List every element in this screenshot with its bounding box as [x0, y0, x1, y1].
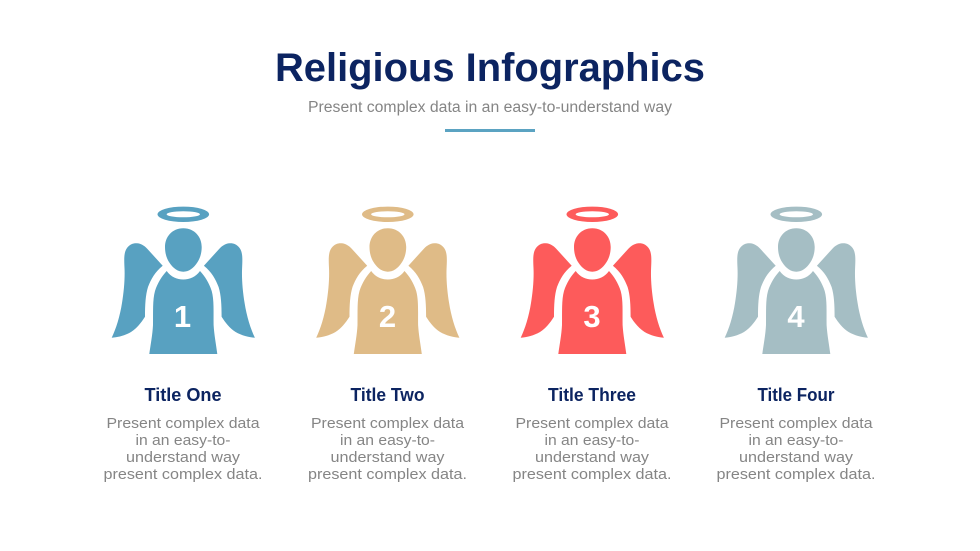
heading: title four: Title Four	[758, 385, 834, 405]
panel: item two	[308, 207, 467, 483]
panel: item four	[716, 207, 876, 483]
text block: description one: understand way	[126, 450, 241, 466]
panel: item three	[512, 207, 672, 483]
title: Religious Infographics	[275, 46, 705, 90]
heading: title two: Title Two	[350, 385, 424, 405]
text block: description one: Present complex data	[106, 416, 261, 432]
text block: description four: present complex data.	[716, 467, 876, 483]
text block: description one: in an easy-to-	[136, 433, 231, 449]
text block: description three: in an easy-to-	[544, 433, 640, 449]
panel: item one	[104, 207, 262, 483]
text block: description three: Present complex data	[516, 416, 670, 432]
text block: description one: present complex data.	[104, 467, 262, 483]
heading: title one: Title One	[144, 385, 222, 405]
heading: title three: Title Three	[548, 385, 636, 405]
icon: angel one	[112, 207, 255, 354]
text block: description two	[308, 416, 467, 483]
text block: description four: understand way	[739, 450, 854, 466]
text block: description two: present complex data.	[308, 467, 467, 483]
text block: description one	[104, 416, 262, 483]
text block: description three	[512, 416, 672, 483]
text block: description four: Present complex data	[720, 416, 874, 432]
icon: angel two: 2	[379, 299, 396, 334]
icon: angel three: 3	[583, 299, 601, 334]
text block: description four: in an easy-to-	[748, 433, 844, 449]
icon: angel four: 4	[787, 299, 805, 334]
icon: angel one: 1	[174, 299, 191, 334]
icon: angel four	[725, 207, 868, 354]
icon: angel three	[521, 207, 664, 354]
text block: description two: Present complex data	[311, 416, 465, 432]
text block: description four	[716, 416, 876, 483]
text block: description two: in an easy-to-	[340, 433, 435, 449]
icon: angel two	[316, 207, 459, 354]
text block: description three: understand way	[535, 450, 650, 466]
subtitle: Present complex data in an easy-to-understand way	[308, 99, 672, 116]
accent rule	[445, 129, 535, 132]
text block: description two: understand way	[330, 450, 445, 466]
text block: description three: present complex data.	[512, 467, 672, 483]
